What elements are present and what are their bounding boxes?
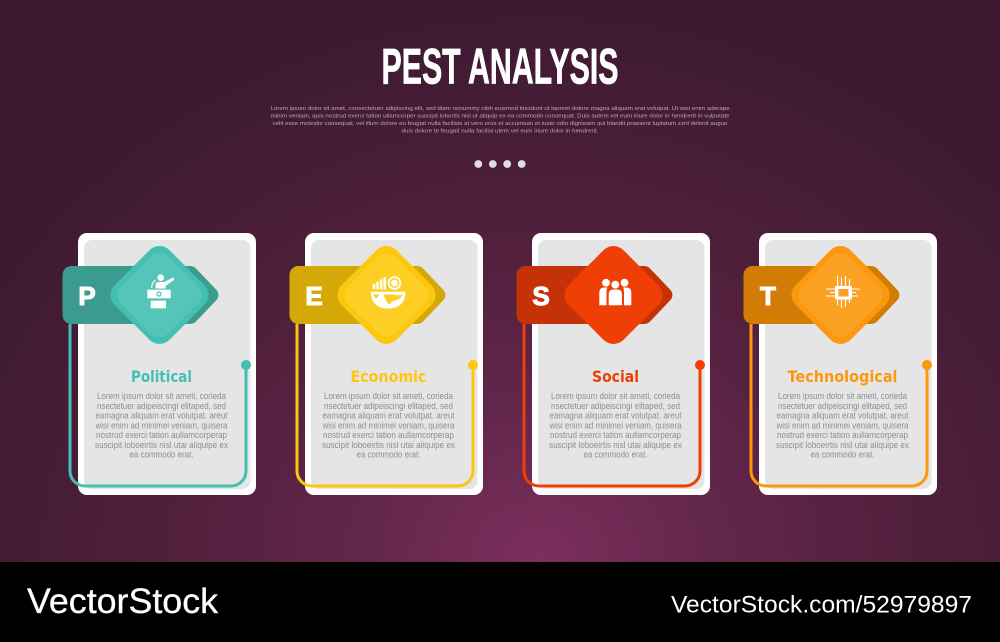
connector line (524, 324, 705, 486)
body text: nostrud exerci tation aullamcorperap (96, 430, 227, 440)
body text: Lorem ipsum dolor sit ameti, corieda (551, 391, 680, 401)
body text: Lorem ipsum dolor sit ameti, corieda (778, 391, 907, 401)
card (532, 233, 710, 495)
body text: Lorem ipsum dolor sit ameti, corieda (324, 391, 453, 401)
card (759, 233, 937, 495)
heading: Technological (788, 367, 898, 386)
diamond badge (332, 240, 441, 350)
body text: nsectetuer adipeiscingi elitaped, sed (324, 401, 453, 411)
body text: eamagna aliquam erat volutpat. areut (322, 410, 455, 420)
body text: ea commodo erat. (130, 450, 194, 460)
body text: nsectetuer adipeiscingi elitaped, sed (551, 401, 680, 411)
panel: technological (744, 233, 937, 495)
intro text block: Lorem ipsum dolor sit amet, consectetuer adipiscing elit, sed diam nonummy nibh euismod tincidunt ut laoreet dolore magna aliquam erat volutpat. Ut wisi enim aderape (270, 106, 730, 112)
intro text block: velit esse molestie consequat, vel illum dolore eu feugiat nulla facilisis at vero eros et accumsan et iusto odio dignissim qui blandit praesent luptatum zzril delenit augue (272, 121, 728, 127)
body text: eamagna aliquam erat volutpat. areut (96, 410, 228, 420)
letter tab (744, 266, 899, 324)
letter tab (290, 266, 445, 324)
body text: ea commodo erat. (810, 450, 874, 460)
connector line (297, 324, 478, 486)
letter S: S (532, 281, 550, 311)
heading: Social (592, 367, 639, 386)
card (305, 233, 483, 495)
body text: nostrud exerci tation aullamcorperap (777, 430, 908, 440)
body text: nsectetuer adipeiscingi elitaped, sed (778, 401, 907, 411)
body text: wisi enim ad minimei veniam, quisera (95, 420, 227, 430)
heading: Economic (350, 367, 426, 386)
letter E: E (305, 281, 323, 311)
body text: suscipit loboeirtis nisl utai aliquipe ex (549, 440, 682, 450)
letter T: T (760, 281, 776, 311)
title: PEST ANALYSIS (382, 38, 618, 94)
body text: nsectetuer adipeiscingi elitaped, sed (97, 401, 226, 411)
body text: ea commodo erat. (356, 450, 420, 460)
diamond badge (786, 240, 895, 350)
body text: Lorem ipsum dolor sit ameti, corieda (97, 391, 226, 401)
body text: nostrud exerci tation aullamcorperap (323, 430, 454, 440)
connector line (751, 324, 932, 486)
diamond badge (105, 240, 214, 350)
body text: eamagna aliquam erat volutpat. areut (776, 410, 909, 420)
icon: microchip (826, 276, 860, 308)
panel: political (62, 233, 256, 495)
icon: globe with coin and bars (371, 276, 406, 308)
connector line (70, 324, 251, 486)
letter P: P (78, 281, 96, 311)
body text: eamagna aliquam erat volutpat. areut (550, 410, 682, 420)
letter tab (516, 266, 672, 324)
panel: social (516, 233, 710, 495)
intro text block: duis dolore te feugait nulla facilisi utem vel eum iriure dolor in hendrerit. (402, 128, 599, 134)
body text: wisi enim ad minimei veniam, quisera (322, 420, 454, 430)
body text: nostrud exerci tation aullamcorperap (550, 430, 681, 440)
heading: Political (131, 367, 192, 386)
body text (322, 391, 455, 460)
diamond badge (559, 240, 668, 350)
panel: economic (290, 233, 483, 495)
card (78, 233, 256, 495)
body text (549, 391, 682, 460)
intro text block (270, 106, 730, 134)
body text: wisi enim ad minimei veniam, quisera (776, 420, 908, 430)
body text: suscipit loboeirtis nisl utai aliquipe ex (322, 440, 455, 450)
letter tab (62, 266, 218, 324)
body text (776, 391, 909, 460)
body text: ea commodo erat. (584, 450, 648, 460)
footer image id: VectorStock.com/52979897 (671, 592, 972, 618)
footer logo text: VectorStock (27, 582, 219, 621)
intro text block: minim veniam, quis nostrud exerci tation ullamcorper suscipit lobortis nisl ut aliquip ex ea commodo consequat. Duis autem vel eum iriure dolor in hendrerit in vulputate (270, 114, 730, 120)
pagination dots (474, 160, 526, 168)
body text: suscipit loboeirtis nisl utai aliquipe ex (95, 440, 228, 450)
footer bar (0, 562, 1000, 642)
body text (95, 391, 228, 460)
icon: speaker at podium (147, 274, 174, 308)
body text: suscipit loboeirtis nisl utai aliquipe ex (776, 440, 909, 450)
body text: wisi enim ad minimei veniam, quisera (549, 420, 682, 430)
icon: group of people (599, 279, 631, 305)
